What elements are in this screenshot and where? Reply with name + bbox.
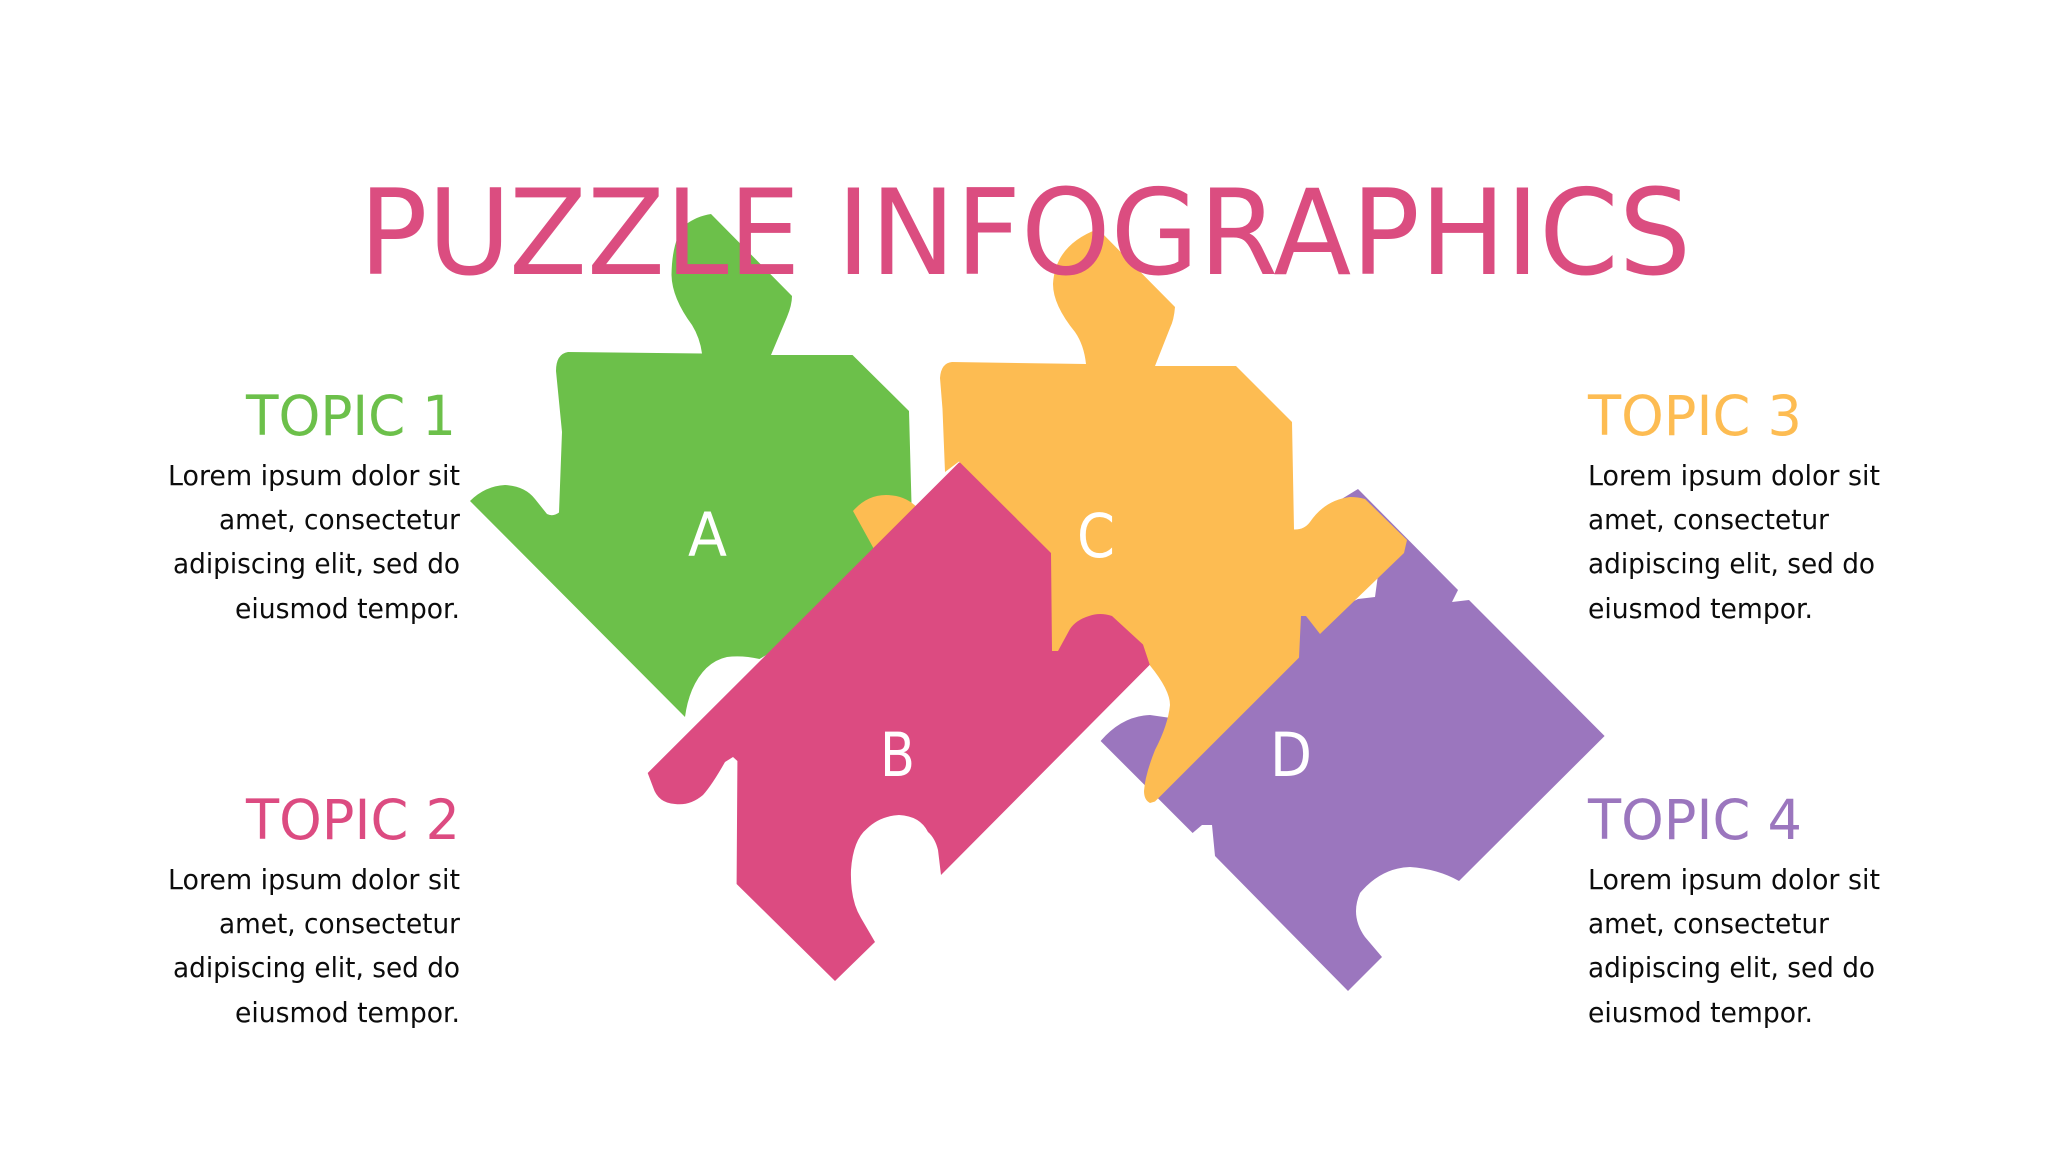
title: PUZZLE INFOGRAPHICS — [359, 165, 1691, 303]
text block: topic 2 body: Lorem ipsum dolor sit — [168, 864, 460, 896]
text block: topic 1 body: adipiscing elit, sed do — [173, 548, 460, 580]
panel: topic 2 — [168, 788, 461, 1029]
text block: topic 4 body: Lorem ipsum dolor sit — [1588, 864, 1880, 896]
text block: topic 1 body: eiusmod tempor. — [235, 593, 460, 625]
text block: topic 4 body: adipiscing elit, sed do — [1588, 952, 1875, 984]
panel: topic 4 — [1587, 788, 1880, 1029]
letter B: B — [880, 720, 915, 791]
puzzle piece C: yellow — [940, 229, 1407, 803]
text block: topic 4 body — [1588, 864, 1880, 1029]
text block: topic 2 body: eiusmod tempor. — [235, 997, 460, 1029]
heading: topic 4: TOPIC 4 — [1587, 788, 1802, 852]
text block: topic 1 body — [168, 460, 461, 625]
text block: topic 4 body: eiusmod tempor. — [1588, 997, 1813, 1029]
heading: topic 1: TOPIC 1 — [245, 384, 456, 448]
puzzle piece B: pink — [648, 462, 1160, 981]
text block: topic 3 body: eiusmod tempor. — [1588, 593, 1813, 625]
heading: topic 3: TOPIC 3 — [1587, 384, 1802, 448]
text block: topic 2 body: amet, consectetur — [219, 908, 461, 940]
text block: topic 3 body: adipiscing elit, sed do — [1588, 548, 1875, 580]
letter D: D — [1270, 720, 1312, 791]
text block: topic 4 body: amet, consectetur — [1588, 908, 1830, 940]
heading: topic 2: TOPIC 2 — [245, 788, 460, 852]
text block: topic 3 body: amet, consectetur — [1588, 504, 1830, 536]
puzzle piece A: green — [470, 214, 930, 717]
text block: topic 3 body — [1588, 460, 1880, 625]
text block: topic 1 body: Lorem ipsum dolor sit — [168, 460, 460, 492]
panel: topic 3 — [1587, 384, 1880, 625]
text block: topic 2 body — [168, 864, 461, 1029]
text block: topic 1 body: amet, consectetur — [219, 504, 461, 536]
text block: topic 2 body: adipiscing elit, sed do — [173, 952, 460, 984]
puzzle piece D: purple — [1101, 489, 1605, 991]
letter A: A — [688, 500, 727, 571]
yellow tab of piece C behind piece B — [853, 495, 930, 560]
letter C: C — [1077, 501, 1115, 572]
panel: topic 1 — [168, 384, 461, 625]
text block: topic 3 body: Lorem ipsum dolor sit — [1588, 460, 1880, 492]
